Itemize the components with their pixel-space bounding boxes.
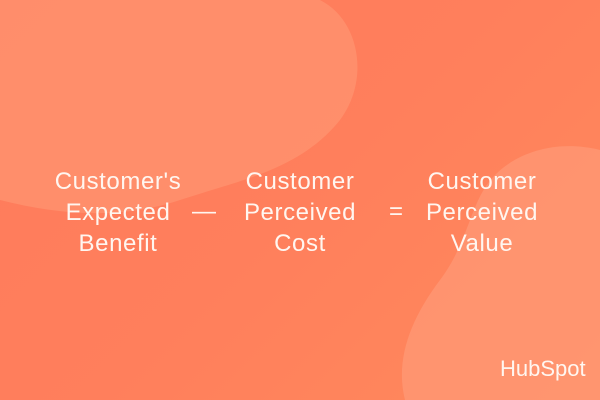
term: expected benefit	[55, 168, 181, 257]
term: expected benefit: Benefit	[79, 230, 157, 257]
operator: minus: —	[192, 198, 216, 225]
term: perceived cost: Customer	[246, 168, 354, 195]
term: perceived cost: Cost	[274, 230, 326, 257]
logo: HubSpot: HubSpot	[500, 356, 586, 381]
term: perceived cost: Perceived	[244, 199, 356, 226]
term: expected benefit: Expected	[66, 199, 170, 226]
term: perceived cost	[244, 168, 356, 257]
term: perceived value: Customer	[428, 168, 536, 195]
term: perceived value	[426, 168, 538, 257]
term: expected benefit: Customer's	[55, 168, 181, 195]
term: perceived value: Perceived	[426, 199, 538, 226]
term: perceived value: Value	[451, 230, 513, 257]
operator: equals: =	[389, 198, 403, 225]
